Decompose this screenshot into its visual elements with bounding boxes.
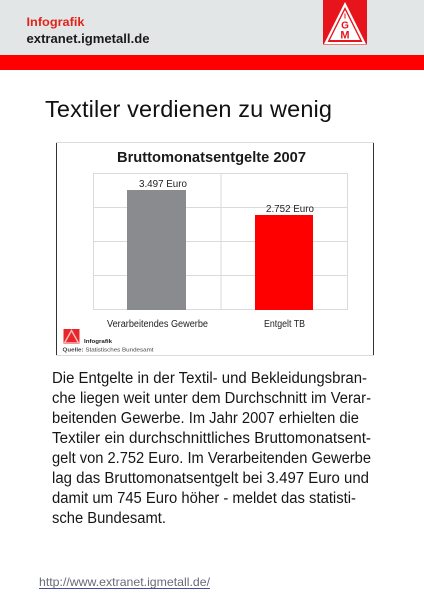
chart source: Quelle: Statistisches Bundesamt (62, 348, 154, 354)
icon: IG Metall logo: G (341, 20, 349, 32)
header label: Infografik: Infografik (26, 15, 85, 29)
footer link: http://www.extranet.igmetall.de/ (39, 575, 211, 589)
header band (0, 0, 424, 70)
body text: Die Entgelte in der Textil- und Bekleidungsbran- (52, 370, 367, 387)
body text: damit um 745 Euro höher - meldet das statisti- (52, 490, 356, 507)
body text: beitenden Gewerbe. Im Jahr 2007 erhielten die (52, 410, 359, 427)
value label: 3.497 Euro: 3.497 Euro (139, 179, 187, 190)
icon: IG Metall logo: M (340, 30, 350, 42)
value label: 2.752 Euro: 2.752 Euro (266, 204, 314, 215)
body text (52, 370, 371, 527)
title: Textiler verdienen zu wenig (45, 96, 332, 122)
axis label: Entgelt TB: Entgelt TB (264, 319, 305, 330)
bar: Verarbeitendes Gewerbe (127, 190, 186, 310)
body text: lag das Bruttomonatsentgelt bei 3.497 Euro und (52, 470, 369, 487)
body text: Textiler ein durchschnittliches Bruttomonatsent- (52, 430, 371, 447)
icon: IG Metall logo (323, 0, 367, 44)
body text: sche Bundesamt. (52, 510, 166, 527)
icon: IG Metall logo: I (344, 14, 346, 20)
body text: che liegen weit unter dem Durchschnitt im Verar- (52, 390, 371, 407)
header url: extranet.igmetall.de (26, 32, 150, 46)
bar: Entgelt TB (255, 215, 313, 310)
chart panel (56, 142, 374, 356)
chart label: Infografik: Infografik (84, 339, 113, 345)
axis label: Verarbeitendes Gewerbe: Verarbeitendes Gewerbe (107, 319, 208, 330)
chart title: Bruttomonatsentgelte 2007 (117, 150, 306, 166)
icon: small IG Metall logo (64, 329, 80, 344)
bar chart (93, 173, 348, 330)
body text: gelt von 2.752 Euro. Im Verarbeitenden Gewerbe (52, 450, 371, 467)
